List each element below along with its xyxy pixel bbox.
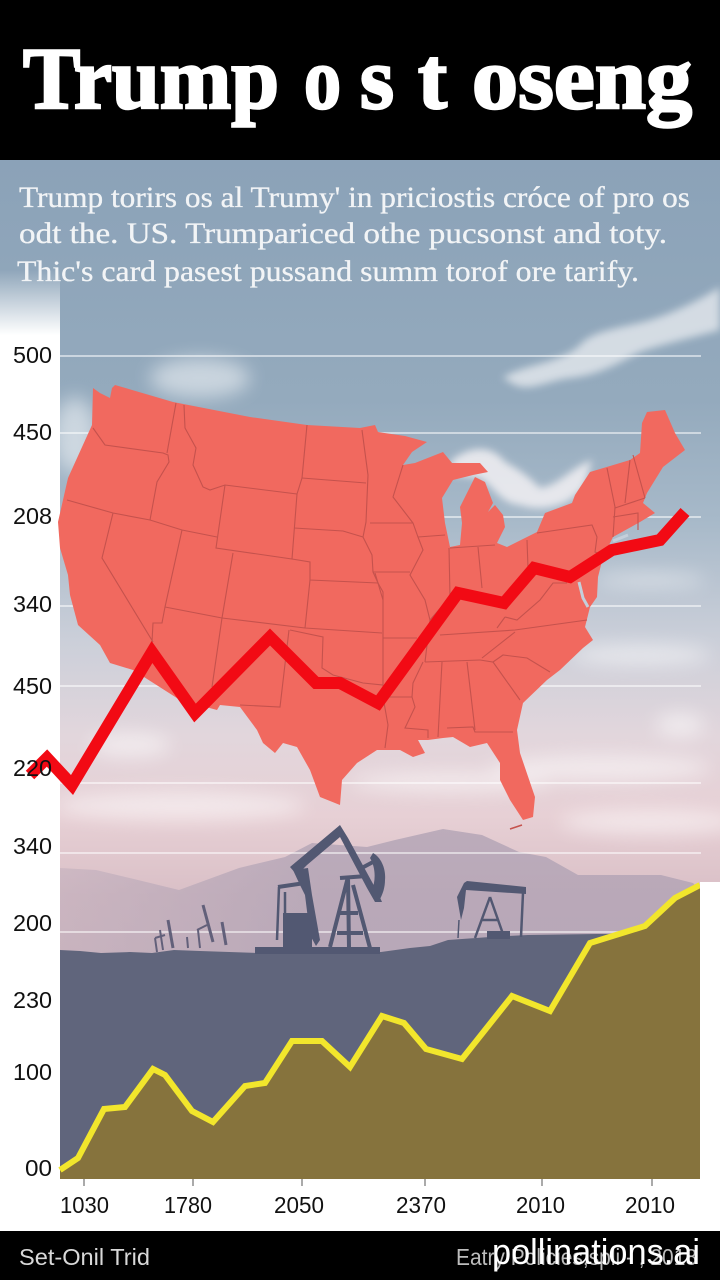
cloud behind the Great Lakes xyxy=(450,449,592,508)
cloud streak xyxy=(503,287,720,387)
x-axis: 2050 xyxy=(274,1192,324,1218)
intro text xyxy=(17,181,690,288)
small pumpjack xyxy=(457,881,526,939)
y-axis labels: 208 xyxy=(13,503,52,529)
right margin white xyxy=(700,882,720,1231)
x-axis: 2010 xyxy=(516,1192,565,1218)
intro text: Trump torirs os al Trumy' in priciostis cróce of pro os xyxy=(19,181,690,214)
y-axis labels: 500 xyxy=(13,342,52,368)
title bar: Trump xyxy=(23,31,279,128)
x-axis xyxy=(60,1179,675,1218)
title bar: s xyxy=(360,31,394,128)
y-axis labels xyxy=(13,342,52,1181)
y-axis labels: 340 xyxy=(13,591,52,617)
ground with oil pumpjacks xyxy=(60,825,700,1179)
title bar xyxy=(0,0,720,160)
intro text: odt the. US. Trumpariced othe pucsonst and toty. xyxy=(19,217,667,250)
y-axis labels: 220 xyxy=(13,755,52,781)
map of the United States xyxy=(58,385,685,829)
x-axis: 1030 xyxy=(60,1192,109,1218)
y-axis labels: 450 xyxy=(13,419,52,445)
title bar: oseng xyxy=(472,31,692,128)
footer source left: Set-Onil Trid xyxy=(19,1244,150,1270)
distant pumpjacks xyxy=(155,905,226,952)
intro text: Thic's card pasest pussand summ torof ore tarify. xyxy=(17,255,639,288)
mountains xyxy=(60,829,700,960)
x-axis: 2010 xyxy=(625,1192,675,1218)
grid lines xyxy=(60,356,701,932)
sky background xyxy=(0,160,720,960)
x-axis: 1780 xyxy=(164,1192,212,1218)
y-axis labels: 00 xyxy=(25,1155,52,1181)
florida keys xyxy=(510,825,522,829)
footer source right: Eatry Policies,spli - , 2018 xyxy=(456,1244,697,1270)
ground silhouette xyxy=(60,934,700,1179)
line chart: red series xyxy=(30,512,685,785)
footer bar xyxy=(0,1231,720,1280)
y-axis labels: 340 xyxy=(13,833,52,859)
left margin white fade xyxy=(0,270,60,1231)
y-axis labels: 100 xyxy=(13,1059,52,1085)
y-axis labels: 200 xyxy=(13,910,52,936)
title bar: t xyxy=(418,31,447,128)
watermark: pollinations.ai xyxy=(492,1231,700,1272)
x-axis: 2370 xyxy=(396,1192,446,1218)
large pumpjack xyxy=(255,825,385,954)
area chart: yellow series xyxy=(60,885,700,1179)
bays xyxy=(579,535,628,607)
y-axis labels: 450 xyxy=(13,673,52,699)
state borders xyxy=(67,403,645,748)
y-axis labels: 230 xyxy=(13,987,52,1013)
title bar: o xyxy=(304,31,341,128)
